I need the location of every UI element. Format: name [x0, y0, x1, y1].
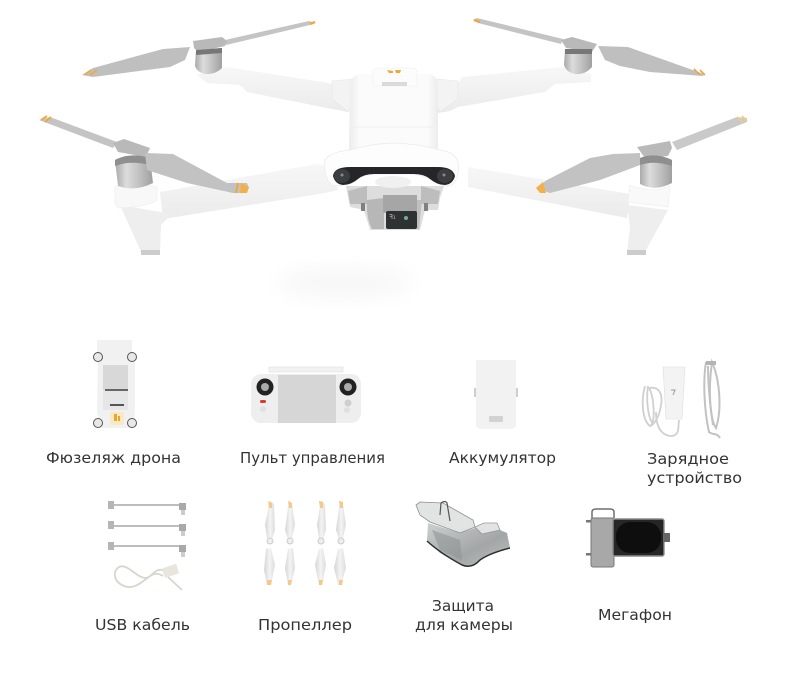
label: propeller: Пропеллер: [258, 616, 352, 634]
item: charger and cable: [643, 361, 720, 438]
rear left arm: [197, 67, 348, 112]
propeller front left: [39, 116, 249, 193]
item: camera guard: [416, 502, 510, 566]
label: charger: Зарядное: [647, 450, 729, 468]
propeller 4: [334, 500, 346, 585]
battery contacts: [489, 416, 503, 422]
rear arm hinges: [332, 78, 365, 112]
phone clamp: [269, 367, 343, 372]
front right arm and leg: [468, 167, 670, 255]
top plate: [373, 68, 417, 86]
propeller 3: [315, 500, 326, 585]
joysticks: [256, 378, 274, 396]
label: battery: Аккумулятор: [449, 449, 556, 467]
drone body: [332, 68, 458, 150]
megaphone speaker grille: [616, 522, 661, 553]
front left arm and leg: [115, 164, 338, 255]
megaphone connector: [664, 533, 670, 542]
item: megaphone: [586, 509, 670, 567]
label: camera guard: Защита: [432, 597, 494, 615]
label: fuselage: Фюзеляж дрона: [46, 449, 181, 467]
controller tablet area: [278, 375, 336, 423]
item: drone fuselage: [94, 340, 136, 428]
battery side clips: [474, 388, 476, 397]
item: usb cables: [108, 501, 186, 590]
propeller rear right: [473, 18, 705, 76]
infographic canvas: для камеры: [415, 616, 513, 634]
propeller rear left: [82, 21, 315, 77]
guard base edge: [427, 541, 510, 566]
propeller 2: [285, 500, 295, 585]
item: remote controller: [251, 367, 361, 423]
usb cord: [115, 564, 182, 590]
fuselage motors: [94, 352, 136, 428]
data cable 3: [108, 542, 186, 557]
propeller 1: [264, 500, 275, 585]
battery body: [476, 360, 516, 429]
fuselage logo badge: [110, 412, 124, 425]
guard top lip: [416, 502, 475, 533]
camera: ꟻ₁: [389, 213, 396, 221]
charger cord: [643, 386, 679, 436]
guard right lip: [475, 523, 500, 534]
red button: [260, 400, 266, 403]
label: megaphone: Мегафон: [598, 606, 672, 624]
item: battery: [474, 360, 518, 429]
power cable coil: [704, 362, 720, 438]
guard shell: [427, 523, 510, 566]
camera: [367, 195, 422, 229]
label: usb cable: USB кабель: [95, 616, 190, 634]
data cable 2: [108, 521, 186, 536]
main housing: [349, 74, 438, 150]
megaphone clips: [586, 520, 592, 522]
propeller front right: [536, 116, 747, 193]
guard clip: [440, 502, 450, 521]
infographic canvas: устройство: [647, 469, 742, 487]
charger brick: [663, 367, 685, 419]
gimbal: [346, 176, 444, 230]
controller body: [251, 374, 361, 423]
ground shadow: [277, 271, 413, 295]
rear right arm: [438, 67, 591, 113]
megaphone grey plate: [591, 518, 614, 567]
drone nose with sensors: [325, 143, 458, 186]
main drone illustration: [39, 18, 747, 295]
fuselage body: [97, 340, 135, 428]
fuselage label plate: [103, 365, 128, 390]
megaphone speaker housing: [613, 519, 664, 556]
control buttons: [260, 406, 266, 412]
guard inner shading: [432, 530, 462, 560]
charger logo: [671, 390, 675, 395]
data cable 1: [108, 501, 186, 515]
megaphone handle: [592, 509, 614, 518]
item: propellers: [264, 500, 346, 585]
label: remote controller: Пульт управления: [240, 449, 385, 467]
